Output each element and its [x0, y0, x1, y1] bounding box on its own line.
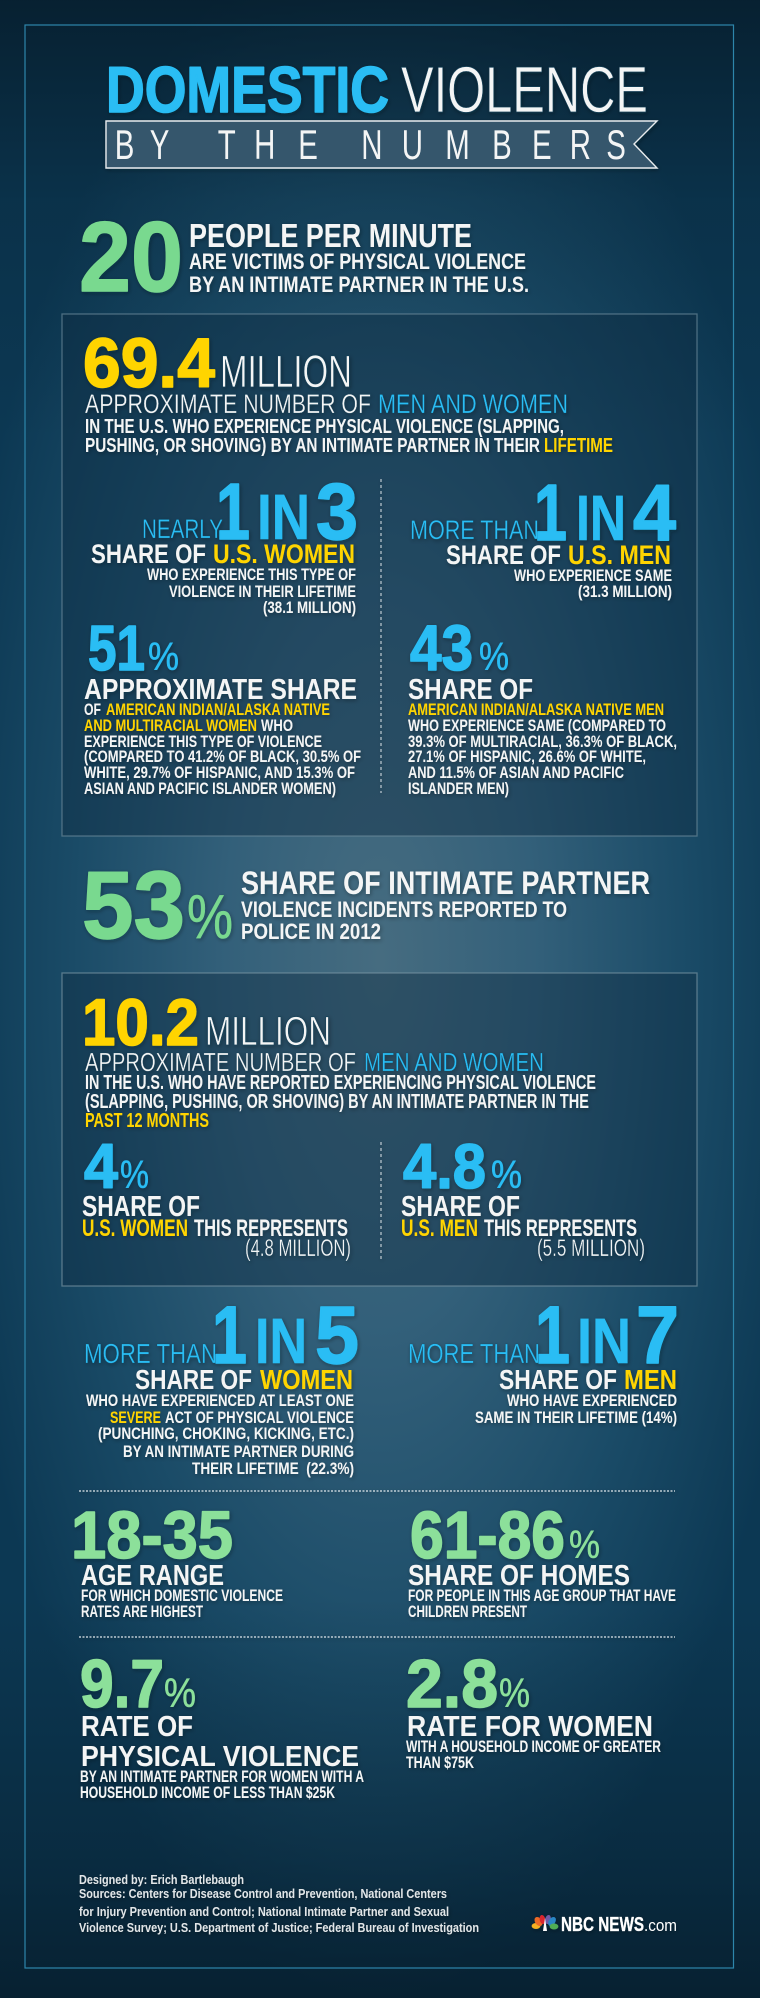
stat: 53% reported to police: VIOLENCE INCIDENTS REPORTED TO — [241, 897, 567, 922]
stat: nearly 1 in 3 women: NEARLY — [142, 514, 223, 544]
divider: upper dotted — [79, 1490, 675, 1492]
stat: nearly 1 in 3 women: IN — [257, 481, 310, 553]
stat: 9.7% rate: % — [164, 1670, 196, 1716]
stat: more than 1 in 4 men: (31.3 MILLION) — [578, 582, 672, 601]
stat: 51% women: APPROXIMATE SHARE — [84, 674, 357, 706]
stat: nearly 1 in 3 women: VIOLENCE IN THEIR LIFETIME — [169, 582, 356, 601]
stat: 43% men: AND 11.5% OF ASIAN AND PACIFIC — [408, 763, 624, 782]
stat: 20 people per minute: 20 — [79, 201, 183, 312]
banner: by the numbers: BY THE NUMBERS — [115, 121, 626, 168]
stat: more than 1 in 7 men: WHO HAVE EXPERIENCED — [507, 1391, 677, 1410]
stat: 9.7% rate: RATE OF — [81, 1711, 193, 1743]
stat: 2.8% rate: WITH A HOUSEHOLD INCOME OF GREATER — [406, 1737, 661, 1756]
title — [106, 53, 648, 126]
stat: more than 1 in 5 women — [84, 1290, 359, 1478]
stat: 61-86% of homes: 61-86 — [410, 1498, 565, 1573]
stat: more than 1 in 4 men: MORE THAN — [410, 515, 539, 545]
stat: 61-86% of homes: % — [569, 1524, 600, 1567]
stat: 2.8% rate: RATE FOR WOMEN — [407, 1711, 653, 1743]
stat: 2.8% rate: % — [499, 1670, 530, 1716]
stat: 10.2 million past 12 months — [82, 985, 596, 1132]
divider: panel one — [380, 479, 382, 793]
stat: nearly 1 in 3 women: WHO EXPERIENCE THIS TYPE OF — [147, 565, 356, 584]
stat: 69.4 million lifetime: MEN AND WOMEN — [378, 389, 568, 419]
stat: 10.2 million past 12 months: APPROXIMATE NUMBER OF — [85, 1047, 356, 1077]
stat: 51% women: AMERICAN INDIAN/ALASKA NATIVE — [106, 700, 330, 719]
stat: 4.8% of men: 4.8 — [403, 1132, 486, 1202]
stat: more than 1 in 4 men: U.S. MEN — [568, 540, 671, 570]
stat: 43% men: AMERICAN INDIAN/ALASKA NATIVE MEN — [408, 700, 664, 719]
stat: more than 1 in 7 men: 7 — [636, 1290, 679, 1381]
stat: 51% women — [84, 612, 361, 798]
stat: 51% women: EXPERIENCE THIS TYPE OF VIOLENCE — [84, 732, 322, 751]
credits and sources: Designed by: Erich Bartlebaugh — [79, 1872, 244, 1887]
stat: more than 1 in 7 men: SAME IN THEIR LIFETIME (14%) — [475, 1408, 677, 1427]
stat: 9.7% rate: BY AN INTIMATE PARTNER FOR WOMEN WITH A — [80, 1767, 364, 1786]
stat: more than 1 in 4 men: 4 — [633, 468, 676, 557]
stat: more than 1 in 5 women: THEIR LIFETIME (22.3%) — [192, 1459, 354, 1478]
stat: more than 1 in 5 women: ACT OF PHYSICAL VIOLENCE — [165, 1408, 354, 1427]
stat: 43% men: WHO EXPERIENCE SAME (COMPARED TO — [408, 716, 666, 735]
stat: 4% of women — [82, 1132, 351, 1262]
stat: 69.4 million lifetime — [83, 324, 613, 457]
stat: 10.2 million past 12 months: 10.2 — [82, 985, 199, 1059]
stat: 51% women: (COMPARED TO 41.2% OF BLACK, 30.5% OF — [84, 747, 361, 766]
stat: 9.7% rate: 9.7 — [80, 1646, 164, 1722]
stat: more than 1 in 4 men — [410, 468, 676, 601]
panel: 10.2 million background — [62, 973, 697, 1286]
logo: NBC News: NBC NEWS — [561, 1914, 644, 1936]
stat: age range 18-35: 18-35 — [71, 1498, 233, 1573]
stat: 4% of women: SHARE OF — [82, 1191, 200, 1223]
stat: more than 1 in 5 women: 5 — [315, 1290, 359, 1381]
stat: 43% men: 43 — [410, 612, 473, 684]
stat: age range 18-35: AGE RANGE — [81, 1560, 224, 1592]
stat: 4% of women: U.S. WOMEN — [82, 1215, 188, 1242]
stat: 43% men: % — [479, 636, 509, 679]
stat: more than 1 in 5 women: MORE THAN — [84, 1338, 217, 1369]
stat: 51% women: % — [148, 636, 179, 679]
stat: 2.8% rate: 2.8 — [406, 1646, 498, 1722]
stat: 43% men: ISLANDER MEN) — [408, 779, 509, 798]
stat: more than 1 in 5 women: WHO HAVE EXPERIENCED AT LEAST ONE — [86, 1391, 354, 1410]
stat: nearly 1 in 3 women: U.S. WOMEN — [213, 539, 355, 569]
stat: 61-86% of homes: CHILDREN PRESENT — [408, 1602, 527, 1621]
stat: 51% women: AND MULTIRACIAL WOMEN — [84, 716, 257, 735]
stat: nearly 1 in 3 women: SHARE OF — [91, 539, 206, 569]
stat: 43% men: 27.1% OF HISPANIC, 26.6% OF WHITE, — [408, 747, 646, 766]
stat: age range 18-35 — [71, 1498, 283, 1621]
stat: 53% reported to police — [82, 852, 650, 959]
title: DOMESTIC — [106, 53, 389, 126]
stat: 4% of women: THIS REPRESENTS — [194, 1215, 348, 1242]
stat: more than 1 in 5 women: SHARE OF — [135, 1364, 252, 1395]
stat: 53% reported to police: POLICE IN 2012 — [241, 919, 381, 944]
stat: 4.8% of men: (5.5 MILLION) — [537, 1235, 645, 1262]
stat: more than 1 in 4 men: WHO EXPERIENCE SAME — [514, 566, 672, 585]
stat: more than 1 in 7 men: IN — [577, 1305, 631, 1377]
stat: 9.7% rate — [80, 1646, 364, 1802]
stat: 53% reported to police: SHARE OF INTIMATE PARTNER — [241, 865, 650, 901]
stat: 51% women: WHO — [261, 716, 293, 735]
stat: more than 1 in 7 men: MEN — [624, 1364, 677, 1395]
stat: 10.2 million past 12 months: (SLAPPING, PUSHING, OR SHOVING) BY AN INTIMATE PARTNER IN THE — [85, 1091, 589, 1113]
stat: 43% men — [408, 612, 677, 798]
stat: nearly 1 in 3 women: (38.1 MILLION) — [263, 598, 356, 617]
stat: more than 1 in 5 women: IN — [255, 1305, 307, 1377]
credits and sources: Sources: Centers for Disease Control and Prevention, National Centers — [79, 1886, 447, 1901]
stat: more than 1 in 7 men: 1 — [535, 1290, 570, 1381]
stat: age range 18-35: FOR WHICH DOMESTIC VIOLENCE — [81, 1586, 283, 1605]
stat: nearly 1 in 3 women: 3 — [316, 467, 358, 556]
stat: 43% men: SHARE OF — [408, 674, 533, 706]
stat: age range 18-35: RATES ARE HIGHEST — [81, 1602, 203, 1621]
credits and sources: Violence Survey; U.S. Department of Justice; Federal Bureau of Investigation — [79, 1920, 479, 1935]
logo: NBC News: .com — [644, 1916, 677, 1935]
icon: peacock — [532, 1914, 558, 1931]
stat: 4.8% of men: % — [491, 1154, 522, 1197]
stat: more than 1 in 4 men: IN — [576, 482, 626, 554]
stat: 4.8% of men — [401, 1132, 645, 1262]
stat: 69.4 million lifetime: PUSHING, OR SHOVING) BY AN INTIMATE PARTNER IN THEIR — [85, 435, 540, 457]
stat: 9.7% rate: HOUSEHOLD INCOME OF LESS THAN $25K — [80, 1783, 336, 1802]
stat: 20 people per minute: ARE VICTIMS OF PHYSICAL VIOLENCE — [189, 249, 526, 274]
stat: 20 people per minute: PEOPLE PER MINUTE — [189, 217, 472, 254]
stat: 51% women: OF — [84, 700, 101, 719]
stat: 10.2 million past 12 months: PAST 12 MONTHS — [85, 1110, 209, 1132]
stat: 61-86% of homes: SHARE OF HOMES — [408, 1560, 630, 1592]
stat: 20 people per minute — [79, 201, 529, 312]
credits and sources: for Injury Prevention and Control; National Intimate Partner and Sexual — [79, 1904, 449, 1919]
title: VIOLENCE — [401, 53, 648, 126]
stat: 51% women: 51 — [88, 612, 145, 684]
stat: more than 1 in 5 women: WOMEN — [260, 1364, 353, 1395]
stat: 69.4 million lifetime: IN THE U.S. WHO EXPERIENCE PHYSICAL VIOLENCE (SLAPPING, — [85, 416, 564, 438]
stat: more than 1 in 7 men: SHARE OF — [499, 1364, 617, 1395]
credits and sources — [79, 1872, 479, 1935]
stat: more than 1 in 7 men: MORE THAN — [408, 1338, 540, 1369]
stat: 69.4 million lifetime: LIFETIME — [544, 435, 613, 457]
stat: 4.8% of men: SHARE OF — [401, 1191, 520, 1223]
stat: 10.2 million past 12 months: MILLION — [205, 1008, 331, 1054]
stat: 4.8% of men: U.S. MEN — [401, 1215, 478, 1242]
stat: 4% of women: (4.8 MILLION) — [245, 1235, 351, 1262]
stat: 2.8% rate: THAN $75K — [406, 1753, 475, 1772]
stat: nearly 1 in 3 women: 1 — [216, 467, 250, 556]
stat: 4% of women: % — [120, 1154, 149, 1197]
stat: more than 1 in 5 women: 1 — [212, 1290, 247, 1381]
stat: more than 1 in 5 women: (PUNCHING, CHOKING, KICKING, ETC.) — [98, 1424, 354, 1443]
divider: panel two — [380, 1142, 382, 1259]
stat: more than 1 in 7 men — [408, 1290, 679, 1427]
stat: 9.7% rate: PHYSICAL VIOLENCE — [81, 1741, 359, 1773]
stat: 69.4 million lifetime: 69.4 — [83, 324, 215, 402]
stat: 51% women: WHITE, 29.7% OF HISPANIC, AND 15.3% OF — [84, 763, 355, 782]
stat: 4% of women: 4 — [84, 1132, 118, 1202]
stat: more than 1 in 4 men: 1 — [534, 468, 567, 557]
divider: lower dotted — [79, 1636, 675, 1638]
stat: more than 1 in 5 women: SEVERE — [110, 1408, 161, 1427]
stat: 43% men: 39.3% OF MULTIRACIAL, 36.3% OF BLACK, — [408, 732, 677, 751]
stat: more than 1 in 4 men: SHARE OF — [446, 540, 561, 570]
stat: 51% women: ASIAN AND PACIFIC ISLANDER WOMEN) — [84, 779, 336, 798]
stat: nearly 1 in 3 women — [91, 467, 358, 617]
stat: 20 people per minute: BY AN INTIMATE PARTNER IN THE U.S. — [189, 272, 529, 297]
stat: 53% reported to police: % — [187, 883, 233, 952]
stat: 10.2 million past 12 months: MEN AND WOMEN — [364, 1047, 544, 1077]
stat: 53% reported to police: 53 — [82, 852, 185, 959]
stat: 4.8% of men: THIS REPRESENTS — [484, 1215, 637, 1242]
stat: 69.4 million lifetime: APPROXIMATE NUMBER OF — [85, 389, 371, 419]
stat: 2.8% rate — [406, 1646, 661, 1772]
stat: 61-86% of homes — [408, 1498, 676, 1621]
stat: 69.4 million lifetime: MILLION — [220, 346, 352, 397]
stat: more than 1 in 5 women: BY AN INTIMATE PARTNER DURING — [123, 1442, 354, 1461]
panel: 69.4 million background — [62, 314, 697, 836]
